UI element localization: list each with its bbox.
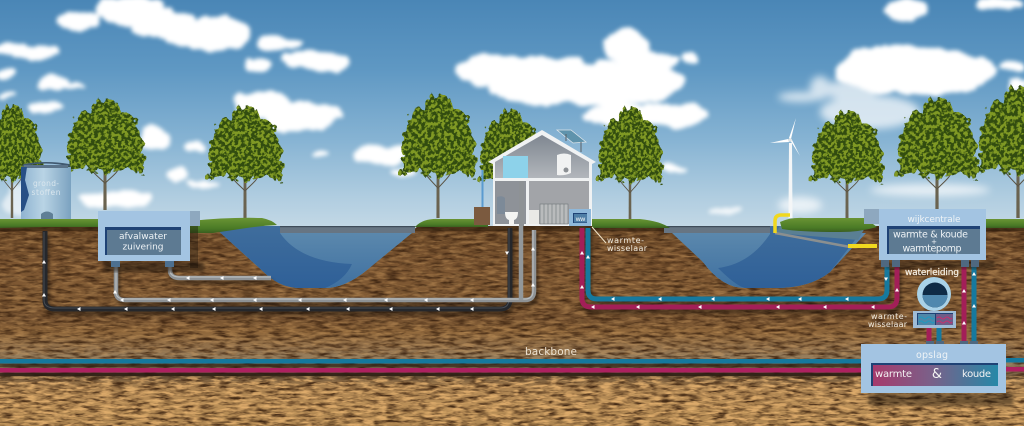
wijkcentrale plant: + <box>931 238 937 246</box>
trees <box>0 87 1024 220</box>
label: warmte-wisselaar at house: warmte- <box>607 236 644 245</box>
label: backbone: backbone <box>525 346 577 358</box>
water storage silo: grondstoffen: stoffen <box>32 188 61 197</box>
wijkcentrale plant: wijkcentrale <box>908 215 961 225</box>
afvalwater zuivering plant: zuivering <box>122 242 164 252</box>
afvalwater zuivering plant <box>98 211 204 272</box>
shower <box>503 156 528 178</box>
water main pipe end <box>917 277 951 311</box>
rain barrel <box>474 170 490 225</box>
solar panel <box>557 130 586 152</box>
backbone pipes <box>0 358 1024 376</box>
house <box>474 130 596 226</box>
water storage silo: grondstoffen <box>21 162 71 219</box>
wind turbine <box>770 118 800 218</box>
opslag storage <box>861 341 1013 406</box>
pond left <box>213 226 415 288</box>
wijkcentrale plant: warmtepomp <box>902 244 962 254</box>
pipe shadows <box>2 232 899 374</box>
label: warmte-wisselaar at house <box>607 236 648 253</box>
wijkcentrale plant <box>864 209 994 269</box>
opslag storage: koude <box>962 369 991 380</box>
wijkcentrale plant: warmte & koude <box>893 230 968 240</box>
grass strips <box>0 218 1024 233</box>
vertical grey pipe <box>519 181 524 226</box>
sink <box>529 210 539 224</box>
pond right <box>664 226 866 288</box>
label: warmte-wisselaar at exchanger: warmte- <box>871 312 907 321</box>
label: warmte-wisselaar at house: wisselaar <box>607 244 648 253</box>
toilet <box>497 196 518 225</box>
boiler <box>557 154 571 175</box>
afvalwater zuivering plant: afvalwater <box>119 232 167 242</box>
clouds <box>0 0 1024 216</box>
store connection pipes <box>929 262 976 344</box>
heat exchanger box <box>569 209 591 226</box>
yellow pipe <box>775 215 877 246</box>
soil layers <box>0 226 1024 426</box>
house body <box>488 130 596 226</box>
district heating pipes <box>580 228 899 309</box>
label: warmte-wisselaar at exchanger: wisselaar <box>868 320 908 329</box>
grey water pipes <box>113 230 535 302</box>
radiator <box>540 204 568 224</box>
opslag storage: & <box>932 367 942 382</box>
sky background <box>0 0 1024 232</box>
label: warmte-wisselaar at exchanger <box>868 312 908 329</box>
opslag storage: opslag <box>916 350 948 361</box>
middle grey pipe from house <box>519 226 523 300</box>
water storage silo: grondstoffen: grond- <box>33 179 59 188</box>
waterleiding label: waterleiding <box>905 268 959 278</box>
opslag storage: warmte <box>875 369 912 380</box>
small heat exchanger <box>913 311 956 328</box>
wastewater pipe: black <box>42 228 510 311</box>
house: ww <box>576 215 586 223</box>
leader: house heat exchanger <box>592 227 606 243</box>
